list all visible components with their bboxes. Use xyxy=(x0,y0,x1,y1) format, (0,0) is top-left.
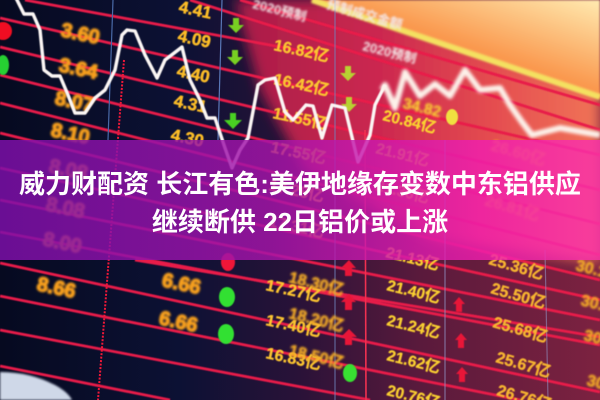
ticker numbers: second column: 4.30 xyxy=(169,125,205,151)
red glow on upper board xyxy=(235,0,600,262)
ticker numbers: third column: 17.40亿 xyxy=(264,311,323,341)
ticker numbers: fourth column: 20.84亿 xyxy=(381,106,438,137)
white blob bottom left xyxy=(0,372,72,400)
title band xyxy=(0,140,600,260)
ticker numbers: fifth column: 25.50亿 xyxy=(489,280,548,312)
white price line chart: sharp left part xyxy=(16,0,385,168)
ticker numbers: left columns (blurred): 3.60 xyxy=(59,19,102,49)
title: 威力财配资 长江有色:美伊地缘存变数中东铝供应 xyxy=(19,169,581,199)
ticker numbers: third column xyxy=(264,36,331,374)
ticker numbers: left columns (blurred): 3.64 xyxy=(57,54,100,84)
sunlit orange corner xyxy=(310,0,600,98)
ticker numbers: fifth column xyxy=(483,137,554,400)
ticker numbers: fifth column: 25.36亿 xyxy=(487,251,546,283)
ticker numbers: left columns (blurred): 8.00 xyxy=(41,228,84,258)
header text on board xyxy=(251,0,418,66)
ticker numbers: left columns (blurred): 6.66 xyxy=(157,307,200,337)
ticker numbers: partial columns at edges: 18.20亿 xyxy=(287,304,346,335)
green and red status markers xyxy=(0,22,458,382)
ticker numbers: fifth column: 26.81亿 xyxy=(483,192,542,224)
ticker numbers: fourth column: 21.91亿 xyxy=(374,139,431,170)
ticker numbers: left columns (blurred): 8.66 xyxy=(35,273,78,303)
ticker numbers: third column: 17.27亿 xyxy=(264,276,323,306)
ticker numbers: fourth column: 21.24亿 xyxy=(385,311,442,342)
red up arrows xyxy=(341,260,468,382)
ticker numbers: left columns (blurred) xyxy=(35,19,203,337)
ticker numbers: left columns (blurred): 8.10 xyxy=(49,119,92,149)
ticker numbers: second column: 4.09 xyxy=(176,26,212,52)
ticker numbers: fourth column: 21.62亿 xyxy=(385,346,442,377)
ticker numbers: second column: 4.40 xyxy=(175,61,211,87)
ticker numbers: fifth column: 25.68亿 xyxy=(491,314,550,346)
title xyxy=(19,169,581,237)
ticker numbers: left columns (blurred): 8.08 xyxy=(44,193,87,223)
green down arrows xyxy=(224,18,357,129)
ticker numbers: fourth column: 21.40亿 xyxy=(385,276,442,307)
white price line chart: blurred right part xyxy=(382,70,600,135)
ticker numbers: second column xyxy=(169,0,213,151)
ticker numbers: fifth column: 26.60亿 xyxy=(489,137,548,169)
ticker numbers: fourth column: 34.82 xyxy=(401,95,443,121)
ticker numbers: fourth column: 21.36亿 xyxy=(374,176,431,207)
header text on board: 2020预制 xyxy=(361,38,418,66)
ticker numbers: third column: 16.83亿 xyxy=(264,344,323,374)
ticker numbers: second column: 4.31 xyxy=(172,91,208,117)
ticker numbers: fourth column: 21.13亿 xyxy=(384,243,441,274)
ticker numbers: partial columns at edges xyxy=(287,257,600,396)
ticker numbers: third column: 17.28亿 xyxy=(267,176,326,206)
ticker numbers: third column: 17.31亿 xyxy=(267,212,326,242)
ticker numbers: partial columns at edges: 18.30亿 xyxy=(287,268,346,299)
ticker numbers: third column: 16.42亿 xyxy=(272,70,331,100)
ticker numbers: partial columns at edges: 18.50亿 xyxy=(287,341,346,372)
ticker numbers: third column: 16.82亿 xyxy=(272,36,331,66)
ticker numbers: third column: 11.55亿 xyxy=(271,104,329,133)
ticker numbers: left columns (blurred): 8.08 xyxy=(47,155,90,185)
ticker numbers: left columns (blurred): 8.07 xyxy=(53,87,96,117)
title: 继续断供 22日铝价或上涨 xyxy=(152,207,448,237)
ticker numbers: third column: 17.55亿 xyxy=(269,138,328,168)
ticker numbers: left columns (blurred): 6.66 xyxy=(160,269,203,299)
yellow board edge xyxy=(312,0,600,97)
vertical column lines xyxy=(98,0,548,400)
ticker numbers: fifth column: 25.67亿 xyxy=(494,349,553,381)
ticker numbers: fourth column xyxy=(374,95,443,400)
